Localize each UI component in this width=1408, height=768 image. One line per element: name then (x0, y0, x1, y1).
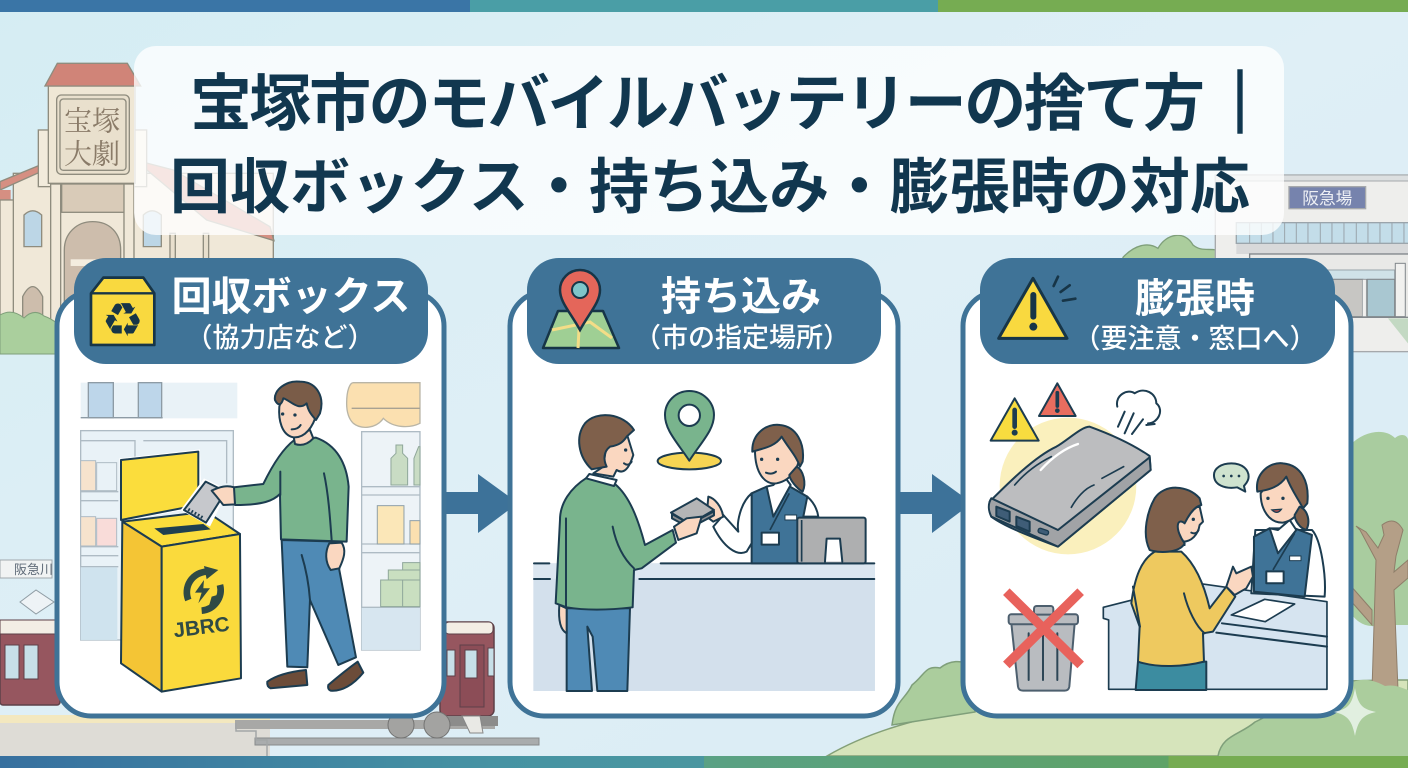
background: train and platform (0, 560, 539, 756)
heading: bring-in (527, 258, 881, 364)
bottom colour bar (0, 756, 1408, 768)
scene: JBRC recycling box: JBRC (172, 613, 231, 642)
background: grand theatre building: 宝塚 (64, 106, 120, 138)
icon: swollen power bank (989, 427, 1151, 547)
title (170, 70, 1271, 221)
background: grand theatre building: 大劇 (64, 138, 120, 170)
panel frame (57, 292, 444, 716)
icon: recycling box: ♻ (102, 294, 144, 348)
background: station building (1123, 175, 1408, 352)
heading: swollen battery (980, 258, 1335, 364)
arrow: step one to two (445, 474, 518, 533)
background: left shrubs (0, 312, 60, 354)
icon: smoke cloud (1117, 391, 1160, 434)
title: 回収ボックス・持ち込み・膨張時の対応 (170, 154, 1250, 221)
figure: woman at the counter (1131, 488, 1253, 690)
icon: map pin (543, 270, 619, 348)
scene: counter and staff (533, 391, 875, 691)
icon: red warning triangle (1039, 383, 1076, 416)
background: train and platform: 阪急川 (14, 562, 53, 577)
heading: collection box (74, 258, 428, 364)
background: title card (134, 46, 1284, 235)
heading: swollen battery: 膨張時 (1135, 277, 1255, 321)
title: ｜ (1209, 70, 1271, 139)
top colour bar (0, 0, 1408, 12)
panel frame (963, 292, 1351, 716)
scene: counter desk (1103, 583, 1327, 689)
heading: bring-in: 持ち込み (661, 275, 821, 319)
icon: speech bubble (1214, 463, 1249, 492)
figure: staff member (1251, 463, 1325, 597)
icon: warning (999, 277, 1075, 338)
heading: collection box: （協力店など） (186, 323, 374, 353)
scene: shop background (81, 383, 420, 650)
heading: bring-in: （市の指定場所） (634, 323, 850, 353)
icon: sparkle (1334, 688, 1376, 736)
scene: swollen battery warning (989, 383, 1327, 691)
heading: collection box: 回収ボックス (172, 275, 410, 319)
panel: swollen battery (963, 258, 1351, 716)
background: station building: 阪急場 (1302, 189, 1352, 208)
icon: yellow warning triangle (991, 398, 1039, 441)
icon: battery handed over (671, 497, 723, 540)
background: shrub behind middle panel (892, 662, 975, 725)
panel: bring-in (510, 258, 898, 716)
icon: location pin (658, 391, 721, 469)
heading: swollen battery: （要注意・窓口へ） (1074, 324, 1316, 354)
icon: recycling box (91, 278, 154, 348)
scene: man dropping battery (181, 381, 363, 691)
background: hill (827, 680, 1408, 756)
arrow: step two to three (899, 474, 972, 533)
icon: crossed-out trash can (1006, 592, 1081, 691)
background: grand theatre building (0, 62, 275, 321)
panel frame (510, 292, 898, 716)
panel: collection box (57, 258, 444, 716)
background: right trees (1218, 432, 1408, 756)
title: 宝塚市のモバイルバッテリーの捨て方 (190, 70, 1205, 139)
scene: JBRC recycling box (119, 449, 241, 692)
